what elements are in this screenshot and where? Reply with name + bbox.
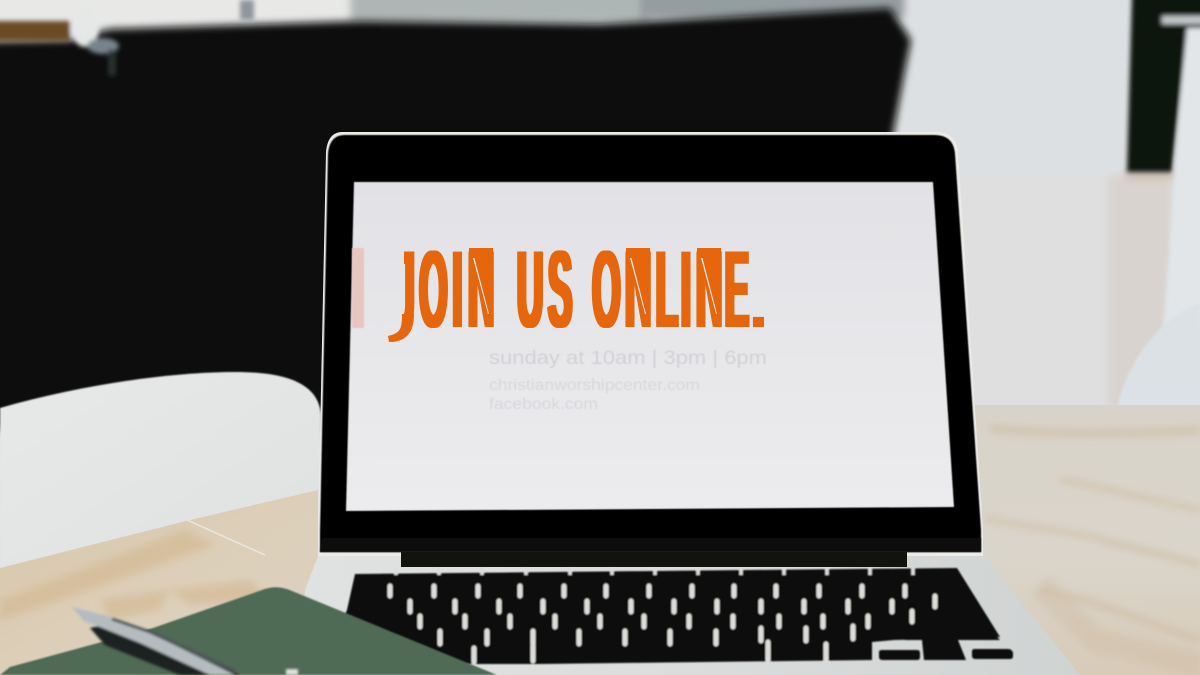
wooden table, left <box>0 490 318 675</box>
salmon bar on screen <box>352 248 364 328</box>
laptop <box>300 132 1080 675</box>
laptop base <box>300 556 1080 675</box>
wooden table, right <box>960 405 1200 675</box>
laptop lid <box>318 132 983 556</box>
white chair, left <box>0 372 321 570</box>
event times: sunday at 10am | 3pm | 6pm <box>489 347 767 369</box>
website links: facebook.com <box>489 396 598 413</box>
headline: ONLINE <box>592 229 749 351</box>
headline <box>388 248 764 342</box>
blurred objects behind the sofa <box>0 0 254 76</box>
white chair, right <box>1118 303 1200 410</box>
headline: JOIN <box>395 229 494 351</box>
pen <box>72 607 298 675</box>
key gaps <box>390 586 935 662</box>
green notebook <box>0 587 497 675</box>
website links: christianworshipcenter.com <box>489 377 700 394</box>
dark sofa <box>0 8 911 430</box>
website links <box>489 377 700 413</box>
keyboard <box>335 568 1013 664</box>
counters inside the N letters <box>473 258 717 328</box>
hinge <box>401 552 907 567</box>
headline: . <box>751 266 765 342</box>
screen <box>346 182 954 511</box>
headline: US <box>517 229 572 351</box>
